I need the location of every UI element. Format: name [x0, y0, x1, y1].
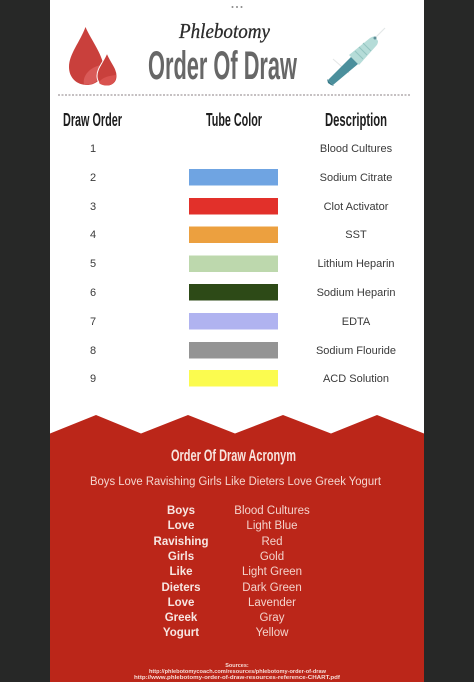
draw order numbers [90, 143, 96, 385]
panel: acronym [50, 415, 424, 682]
acronym words: Girls [168, 551, 194, 563]
acronym colours: Light Blue [246, 520, 298, 532]
acronym sentence: Boys Love Ravishing Girls Like Dieters Love Greek Yogurt [90, 476, 382, 488]
acronym colours: Yellow [256, 627, 289, 639]
acronym words: Greek [165, 612, 198, 624]
draw order numbers: 5 [90, 258, 96, 270]
acronym words: Love [168, 520, 194, 532]
descriptions: Sodium Heparin [317, 287, 395, 299]
draw order numbers: 2 [90, 172, 96, 184]
acronym colours: Blood Cultures [234, 505, 310, 517]
table header [63, 110, 387, 130]
draw order numbers: 9 [90, 373, 96, 385]
heading: Order Of Draw: Order Of Draw [148, 44, 297, 88]
acronym words: Ravishing [154, 536, 208, 548]
descriptions [316, 143, 396, 385]
acronym heading: Order Of Draw Acronym [171, 446, 296, 465]
draw order numbers: 8 [90, 345, 96, 357]
acronym colours: Gray [260, 612, 285, 624]
descriptions: Clot Activator [324, 201, 389, 213]
sources: http://phlebotomycoach.com/resources/phlebotomy-order-of-draw [149, 669, 327, 675]
draw order numbers: 3 [90, 201, 96, 213]
acronym colours: Lavender [248, 597, 296, 609]
acronym words: Like [169, 566, 193, 578]
acronym words: Yogurt [163, 627, 199, 639]
descriptions: Lithium Heparin [317, 258, 395, 270]
acronym colours [234, 505, 310, 639]
icon: blood drops [69, 27, 117, 86]
acronym words: Dieters [162, 582, 200, 594]
tube colour bars [189, 169, 278, 386]
top ellipsis dots [232, 6, 242, 8]
acronym colours: Light Green [242, 566, 302, 578]
draw order numbers: 4 [90, 229, 96, 241]
acronym colours: Dark Green [242, 582, 302, 594]
descriptions: ACD Solution [323, 373, 389, 385]
sources [134, 663, 340, 681]
dotted divider [58, 94, 411, 96]
acronym words [154, 505, 208, 639]
table header: Tube Color [206, 110, 262, 130]
draw order numbers: 7 [90, 316, 96, 328]
sources: Sources: [225, 663, 249, 669]
table header: Draw Order [63, 110, 122, 130]
icon: syringe [327, 28, 385, 86]
descriptions: SST [345, 229, 367, 241]
descriptions: EDTA [342, 316, 371, 328]
draw order numbers: 1 [90, 143, 96, 155]
descriptions: Blood Cultures [320, 143, 393, 155]
draw order numbers: 6 [90, 287, 96, 299]
acronym words: Love [168, 597, 194, 609]
descriptions: Sodium Citrate [320, 172, 392, 184]
sources: http://www.phlebotomy-order-of-draw-resources-reference-CHART.pdf [134, 675, 340, 681]
acronym colours: Gold [260, 551, 284, 563]
descriptions: Sodium Flouride [316, 345, 396, 357]
heading: Phlebotomy: Phlebotomy [178, 19, 271, 43]
acronym colours: Red [261, 536, 283, 548]
acronym words: Boys [167, 505, 195, 517]
table header: Description [325, 110, 387, 130]
